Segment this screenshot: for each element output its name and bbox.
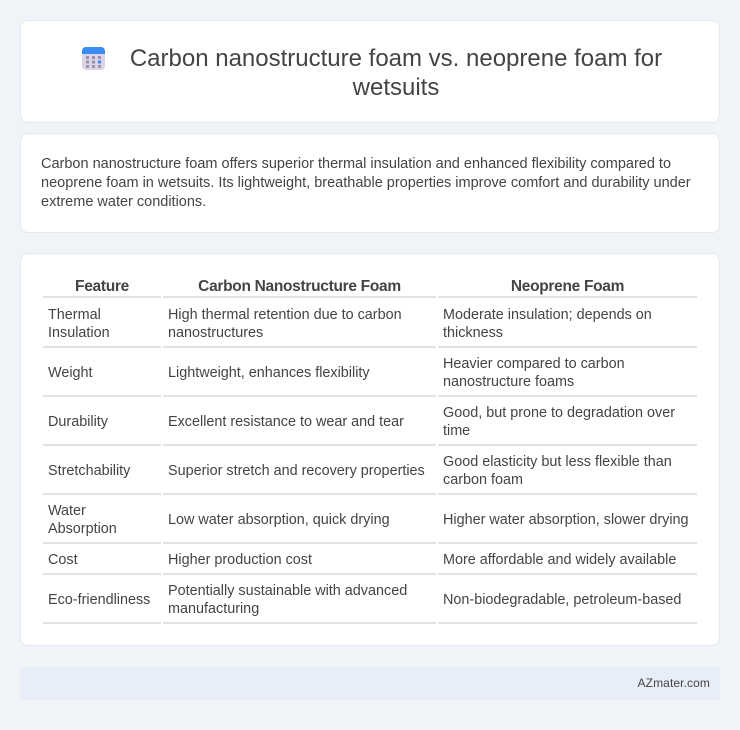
row: durability: Durability	[48, 414, 108, 430]
row: thermal insulation: Moderate insulation; depends on	[443, 307, 652, 323]
row: stretchability: Superior stretch and recovery properties	[168, 463, 425, 479]
panel: title card	[20, 20, 720, 123]
row: water absorption: Absorption	[48, 521, 117, 537]
row: durability: Good, but prone to degradation over	[443, 405, 675, 421]
row: eco-friendliness: Potentially sustainable with advanced	[168, 583, 407, 599]
summary text: Carbon nanostructure foam offers superior thermal insulation and enhanced flexibility compared to	[41, 156, 671, 172]
row: thermal insulation: High thermal retention due to carbon	[168, 307, 402, 323]
row: stretchability	[43, 454, 697, 495]
row: durability: time	[443, 423, 470, 439]
footer text: AZmater.com	[638, 676, 710, 690]
row: cost: Higher production cost	[168, 552, 312, 568]
row: thermal insulation: thickness	[443, 325, 503, 341]
panel: comparison table card	[20, 253, 720, 646]
row: water absorption: Water	[48, 503, 86, 519]
row: thermal insulation: Thermal	[48, 307, 101, 323]
panel: summary card	[20, 133, 720, 233]
row: weight: Weight	[48, 365, 93, 381]
row: eco-friendliness: Non-biodegradable, petroleum-based	[443, 592, 681, 608]
row: weight: Lightweight, enhances flexibility	[168, 365, 370, 381]
footer bar	[20, 667, 720, 700]
header: Feature: Feature	[75, 278, 129, 295]
row: stretchability: carbon foam	[443, 472, 523, 488]
row: cost: Cost	[48, 552, 78, 568]
icon: calendar	[82, 47, 105, 70]
row: stretchability: Good elasticity but less flexible than	[443, 454, 672, 470]
row: cost: More affordable and widely available	[443, 552, 676, 568]
summary text: neoprene foam in wetsuits. Its lightweight, breathable properties improve comfort and durability under	[41, 175, 691, 191]
header: Carbon Nanostructure Foam: Carbon Nanostructure Foam	[198, 278, 401, 295]
row: water absorption: Higher water absorption, slower drying	[443, 512, 689, 528]
row: eco-friendliness: Eco-friendliness	[48, 592, 150, 608]
row: weight: nanostructure foams	[443, 374, 574, 390]
row: stretchability: Stretchability	[48, 463, 130, 479]
row: durability	[43, 405, 697, 446]
row: water absorption: Low water absorption, quick drying	[168, 512, 390, 528]
summary text: extreme water conditions.	[41, 194, 206, 210]
row: eco-friendliness	[43, 583, 697, 624]
table header row	[43, 278, 697, 298]
row: weight: Heavier compared to carbon	[443, 356, 625, 372]
row: durability: Excellent resistance to wear and tear	[168, 414, 404, 430]
comparison table	[43, 278, 697, 624]
title: Carbon nanostructure foam vs. neoprene foam for wetsuits	[130, 45, 662, 101]
row: cost	[43, 552, 697, 575]
header: Neoprene Foam: Neoprene Foam	[511, 278, 624, 295]
row: thermal insulation: Insulation	[48, 325, 110, 341]
row: eco-friendliness: manufacturing	[168, 601, 259, 617]
row: water absorption	[43, 503, 697, 544]
row: weight	[43, 356, 697, 397]
row: thermal insulation	[43, 307, 697, 348]
summary text	[41, 156, 691, 210]
row: thermal insulation: nanostructures	[168, 325, 263, 341]
